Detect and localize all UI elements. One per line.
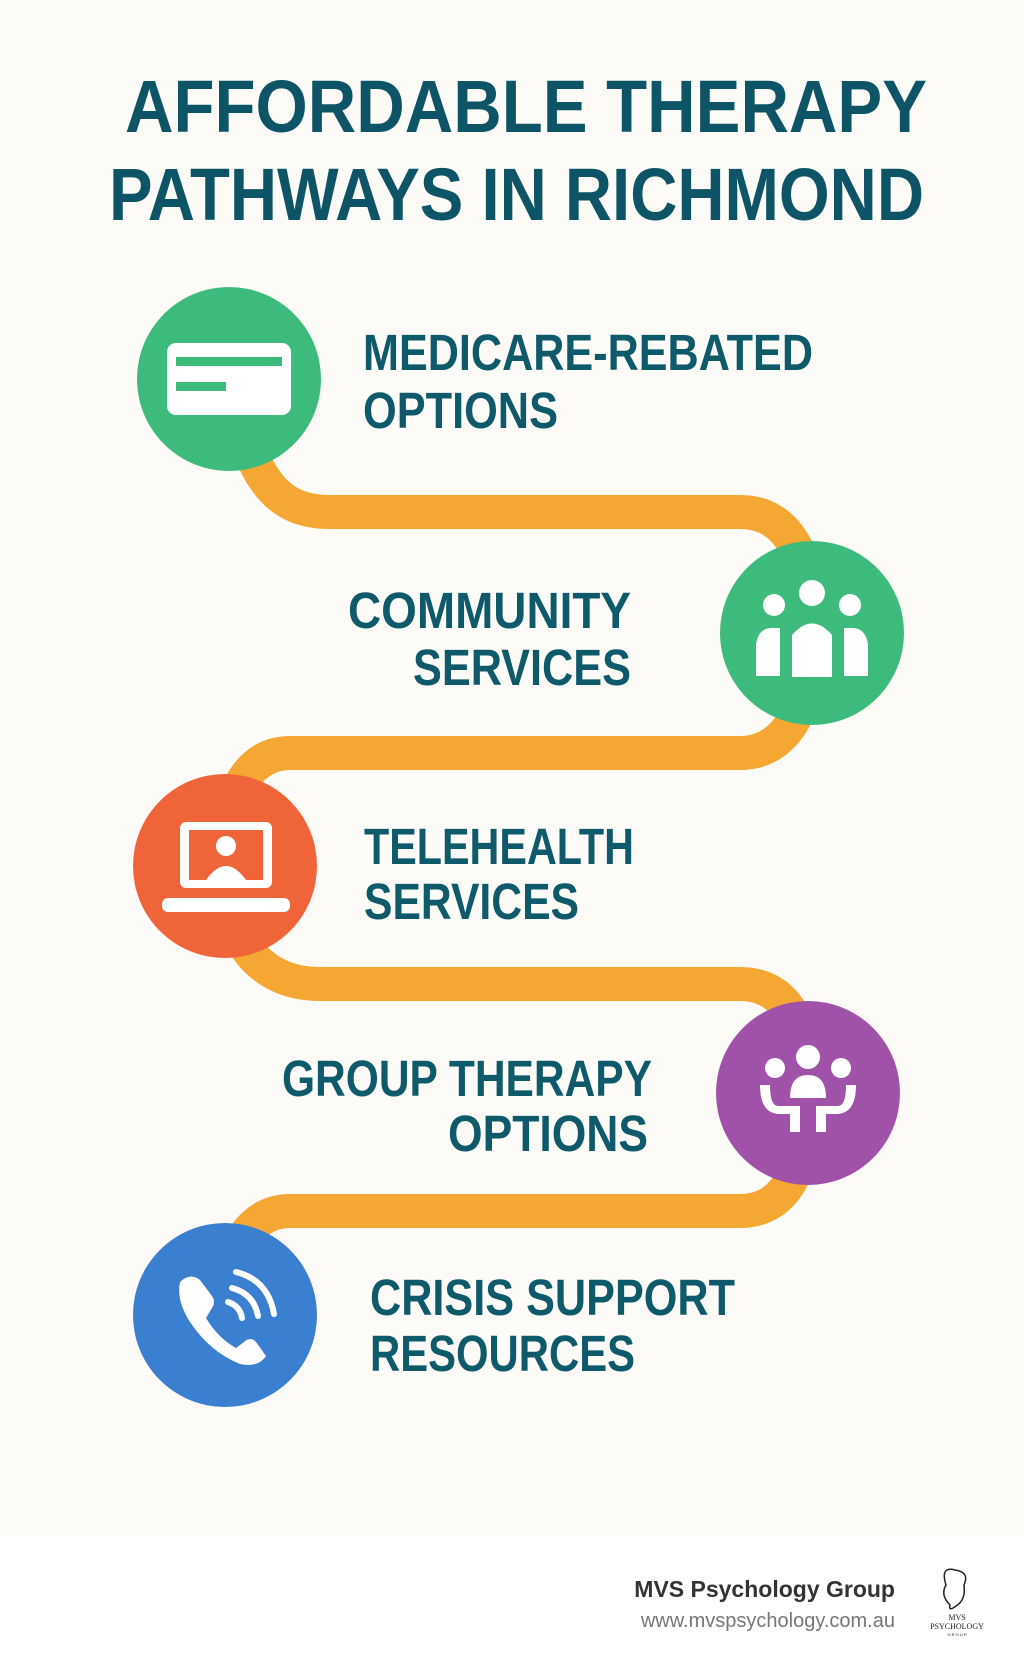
title: PATHWAYS IN RICHMOND — [109, 153, 924, 236]
step 1 label — [363, 324, 813, 439]
step 5 label: RESOURCES — [370, 1325, 635, 1382]
step 4 label: OPTIONS — [448, 1105, 648, 1162]
footer logo — [930, 1569, 984, 1637]
title — [109, 65, 927, 236]
step 4: group therapy icon — [716, 1001, 900, 1185]
step 5 label: CRISIS SUPPORT — [370, 1269, 735, 1326]
step 2: community icon — [720, 541, 904, 725]
pathway road — [225, 379, 812, 1315]
step 4 label: GROUP THERAPY — [282, 1050, 652, 1107]
step 1 label: OPTIONS — [363, 382, 558, 439]
footer logo: G R O U P — [947, 1632, 967, 1637]
footer logo: MVS — [948, 1613, 966, 1622]
step 2 label: SERVICES — [413, 639, 631, 696]
footer brand text — [634, 1576, 895, 1632]
step 2 label — [348, 582, 631, 696]
step 1 label: MEDICARE-REBATED — [363, 324, 813, 381]
title: AFFORDABLE THERAPY — [125, 65, 927, 148]
step 3 label: SERVICES — [364, 873, 579, 930]
step 4 label — [282, 1050, 652, 1162]
step 5: crisis phone icon — [133, 1223, 317, 1407]
step 3 label — [364, 818, 634, 930]
footer brand text: www.mvspsychology.com.au — [640, 1610, 895, 1632]
step 3: telehealth icon — [133, 774, 317, 958]
step 5 label — [370, 1269, 735, 1382]
step 2 label: COMMUNITY — [348, 582, 631, 639]
step 1: medicare icon — [137, 287, 321, 471]
footer brand text: MVS Psychology Group — [634, 1576, 895, 1602]
footer logo: PSYCHOLOGY — [930, 1622, 984, 1631]
step 3 label: TELEHEALTH — [364, 818, 634, 875]
